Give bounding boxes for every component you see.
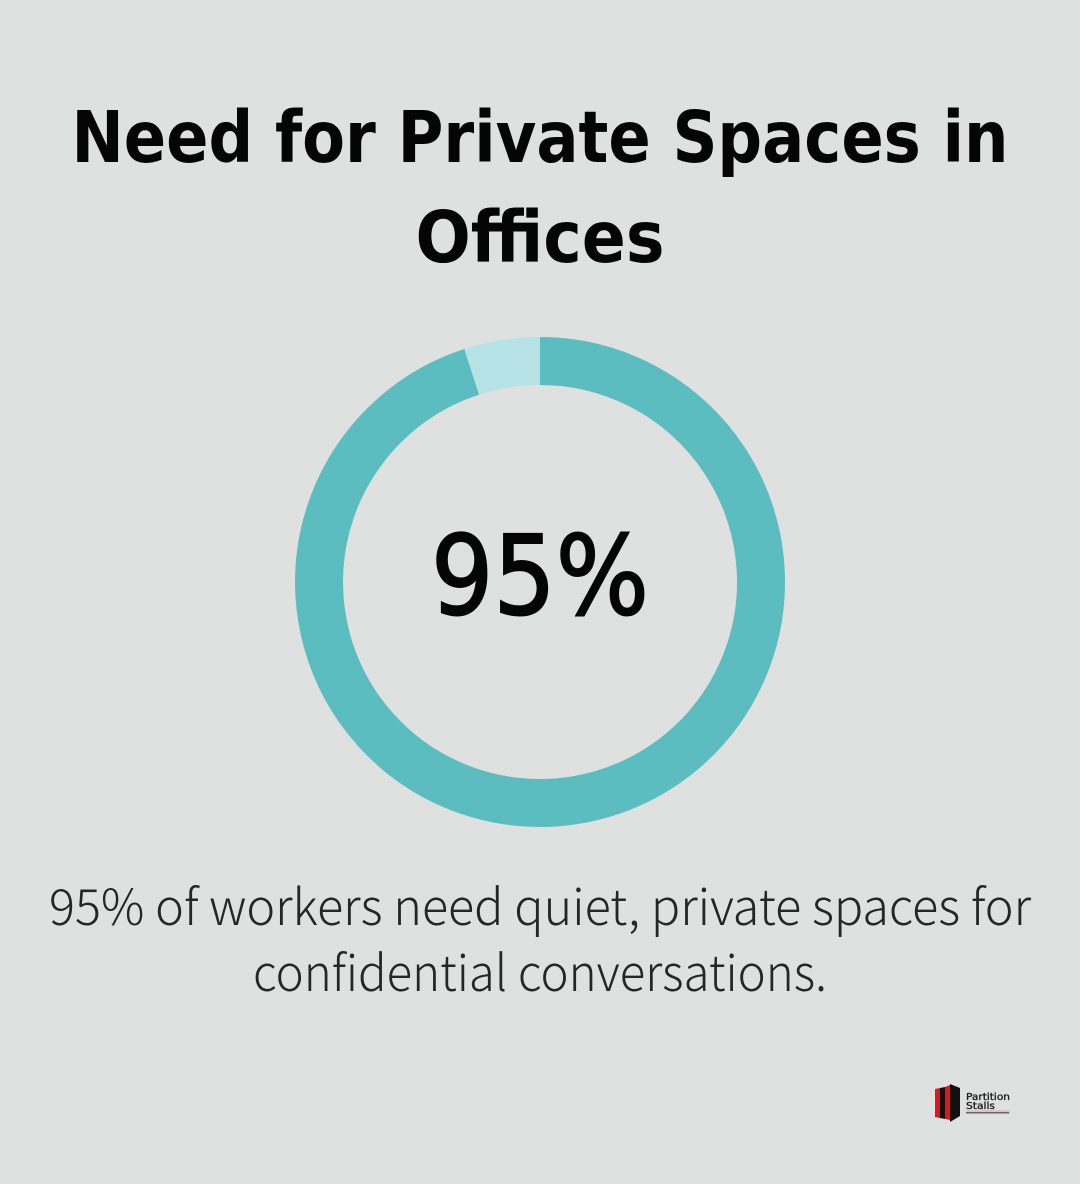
logo tagline strip [966,1110,1010,1114]
ring segment: remaining 5% [472,361,540,372]
donut chart: 95% [319,361,761,803]
title: Offices [416,196,664,279]
logo wordmark: Stalls [966,1101,995,1112]
title [72,96,1008,279]
description text: 95% of workers need quiet, private spaces for [49,868,1032,940]
logo wordmark [966,1092,1010,1112]
description text [49,868,1032,1006]
logo wordmark: Partition [966,1092,1010,1103]
logo icon [935,1084,960,1122]
ring segment: 95% [319,361,761,803]
logo: Partition Stalls [935,1084,1010,1122]
description text: confidential conversations. [253,934,827,1006]
center value: 95% [431,512,649,640]
